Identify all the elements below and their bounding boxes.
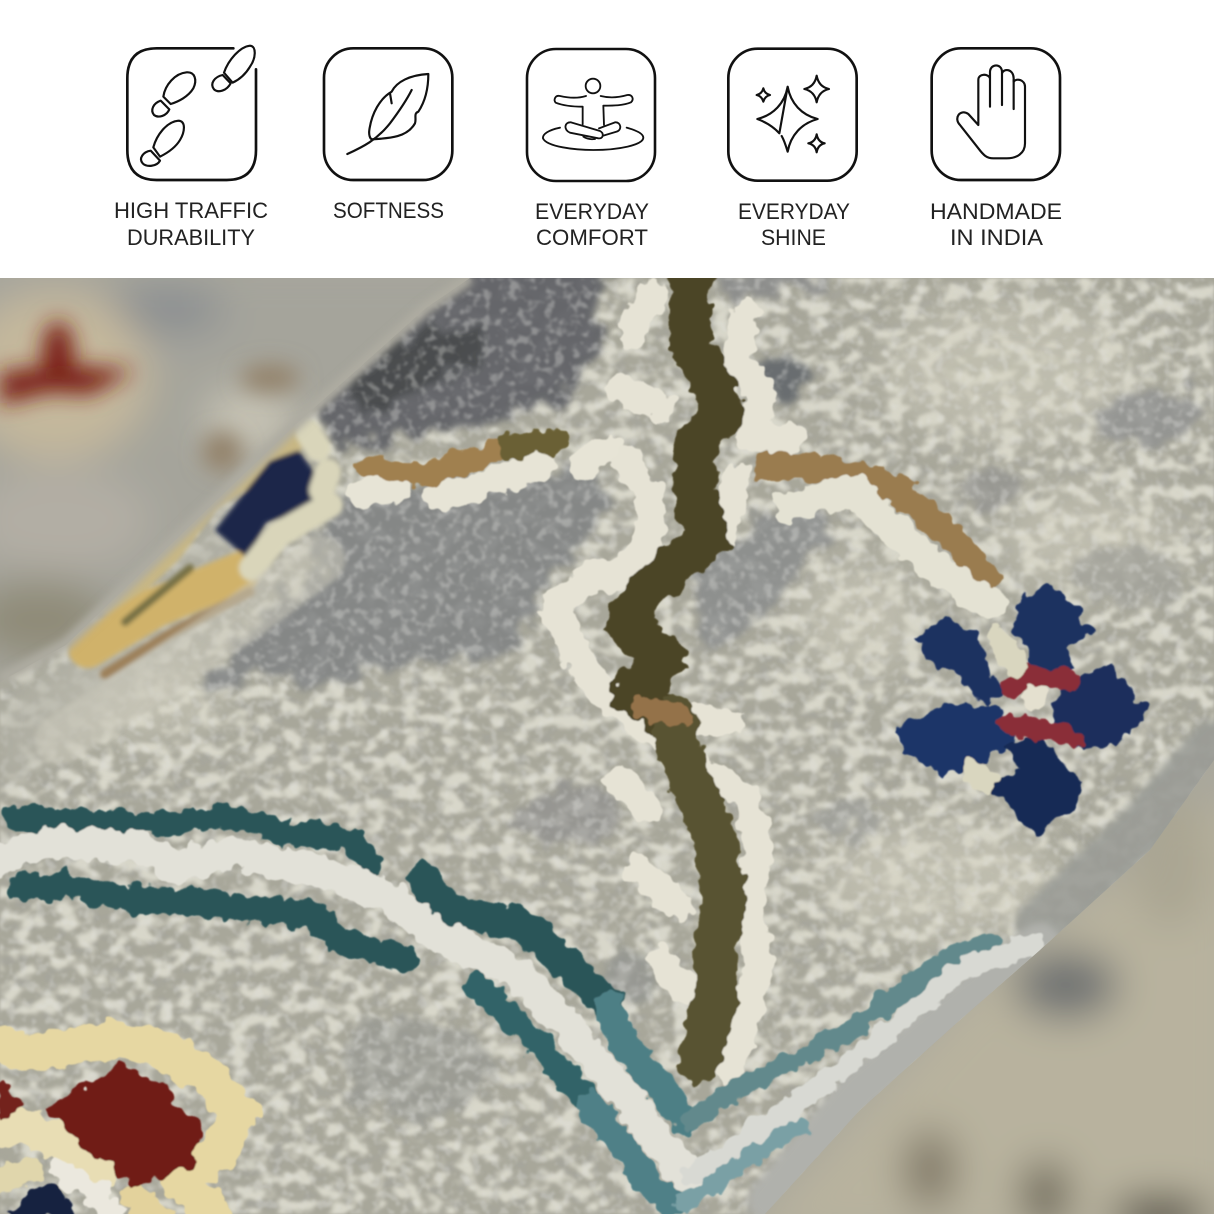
feature: high traffic durability [114, 46, 268, 250]
fine wool noise [0, 278, 1214, 1214]
wool knot texture [0, 278, 1214, 1214]
navy block, left motif [217, 452, 325, 556]
white header background [0, 0, 1214, 278]
photo: close-up of rolled hand-knotted rug [0, 256, 1214, 1214]
white outer band along rug edge [690, 943, 1033, 1176]
label: HIGH TRAFFIC [114, 198, 268, 223]
navy cross motif [895, 583, 1147, 835]
grey binding along the lower rug edge [770, 745, 1214, 1200]
irregular grey patches of the field [203, 256, 1198, 1118]
label: EVERYDAY [535, 199, 649, 224]
blurred floor, upper left [0, 278, 294, 667]
soft focus over the far rug edge [0, 502, 272, 786]
feature: softness [324, 48, 452, 223]
blurred floor, lower right [774, 824, 1214, 1214]
label: HANDMADE [930, 199, 1062, 224]
motifs with woolly edges [0, 283, 1147, 1214]
label: SHINE [761, 225, 826, 250]
olive zigzag line [625, 283, 725, 1062]
blurred red motif on floor [0, 321, 135, 405]
label: COMFORT [536, 225, 648, 250]
feature: everyday comfort [527, 49, 655, 250]
cream knots between cross arms [972, 640, 1015, 782]
soft blurred rug silhouette edge [0, 278, 470, 680]
blurred tan spots on floor [202, 364, 300, 472]
feature: handmade in india [930, 48, 1062, 250]
label: DURABILITY [127, 225, 255, 250]
card frame [527, 49, 655, 181]
icon: meditating figure [543, 79, 643, 150]
red centre of cross [1010, 675, 1075, 738]
white arc under brown [790, 491, 990, 605]
white dotted line, upper left [360, 448, 610, 498]
label: EVERYDAY [738, 199, 850, 224]
pale knot rows under the motif [60, 560, 320, 740]
cream line beside navy block [252, 432, 330, 568]
cream border beside olive zigzag [555, 296, 790, 1070]
icon: footprints in rounded square [127, 46, 256, 180]
label: SOFTNESS [333, 198, 444, 223]
pale yellow stripes, left motif [88, 442, 285, 674]
label: IN INDIA [950, 225, 1043, 250]
white band between teal curves [0, 843, 688, 1176]
icon: open hand in rounded square [932, 48, 1060, 180]
icon: sparkles in rounded square [728, 49, 857, 181]
bottom-left medallion [0, 1040, 240, 1214]
brown arc, upper right [766, 466, 985, 578]
feature: everyday shine [728, 49, 857, 250]
light cream field patches [50, 300, 1180, 940]
out-of-focus motifs, left [60, 432, 330, 740]
rug body [0, 256, 1214, 1214]
icon: feather in rounded square [324, 48, 452, 180]
teal curves [15, 816, 995, 1203]
brown line, upper left [368, 441, 555, 475]
